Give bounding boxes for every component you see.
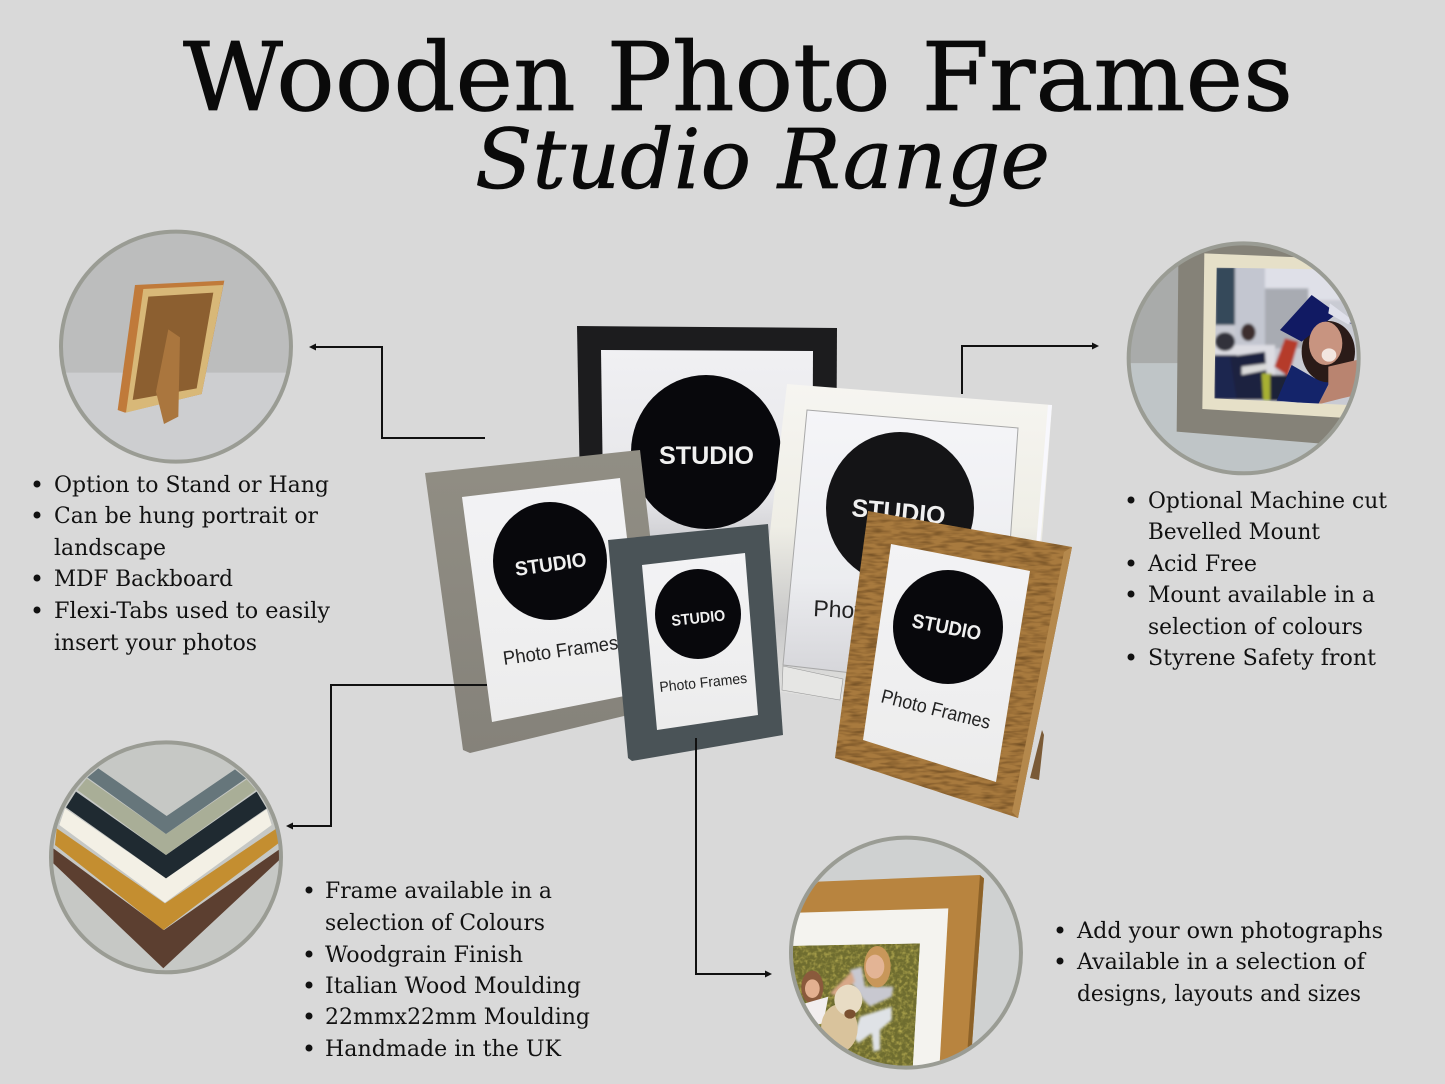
text block: mount features [1128, 489, 1387, 671]
text block: moulding features: Handmade in the UK [325, 1037, 562, 1062]
subtitle: Studio Range [475, 113, 1050, 208]
frame: black: STUDIO [659, 442, 754, 470]
photo circle: bevelled mount closeup [1125, 242, 1365, 477]
text block: moulding features: selection of Colours [325, 911, 545, 936]
frame: white: Photo Frames [813, 595, 958, 629]
frame: black [577, 326, 837, 560]
text block: moulding features: Frame available in a [325, 879, 552, 904]
text block: mount features: Bevelled Mount [1148, 520, 1320, 545]
frame: taupe: Photo Frames [502, 632, 620, 670]
frame: slate: Photo Frames [659, 671, 748, 696]
text block: mount features: Acid Free [1147, 552, 1257, 577]
text block: mount features: Styrene Safety front [1148, 646, 1376, 671]
title: Wooden Photo Frames [183, 23, 1293, 133]
product group: five frames [425, 326, 1072, 818]
text block: photographs and designs [1056, 919, 1383, 1007]
text block: stand and hang features: MDF Backboard [54, 567, 233, 592]
text block: stand and hang features: insert your photos [54, 631, 257, 656]
text block: stand and hang features [34, 473, 331, 656]
frame: taupe: STUDIO [514, 549, 588, 581]
photo circle: oak frame with family photograph [787, 833, 1027, 1073]
text block: mount features: Mount available in a [1148, 583, 1375, 608]
text block: stand and hang features: Can be hung portrait or [54, 504, 318, 529]
text block: moulding features: Woodgrain Finish [325, 943, 523, 968]
text block: photographs and designs: designs, layouts and sizes [1077, 982, 1361, 1007]
text block: mount features: selection of colours [1148, 615, 1363, 640]
frame: slate [608, 524, 783, 761]
arrow: frame to photographs photo [696, 738, 772, 978]
arrow: frame to mount photo [962, 342, 1099, 394]
frame: oak: Photo Frames [879, 686, 993, 734]
arrow: frame to stand photo [309, 344, 485, 438]
text block: moulding features: 22mmx22mm Moulding [325, 1005, 590, 1030]
frame: oak: STUDIO [910, 610, 983, 645]
frame: white [752, 384, 1052, 700]
arrow: frame to colours photo [286, 685, 487, 830]
text block: photographs and designs: Add your own photographs [1076, 919, 1383, 944]
text block: mount features: Optional Machine cut [1148, 489, 1387, 514]
text block: stand and hang features: Option to Stand or Hang [54, 473, 329, 498]
text block: moulding features [306, 879, 590, 1062]
photo circle: colour swatches of moulding [47, 737, 287, 980]
text block: moulding features: Italian Wood Moulding [325, 974, 581, 999]
photo circle: back of frame with stand [53, 227, 300, 469]
text block: photographs and designs: Available in a selection of [1076, 950, 1367, 975]
frame: white: STUDIO [850, 494, 947, 530]
text block: stand and hang features: Flexi-Tabs used to easily [54, 599, 331, 624]
text block: stand and hang features: landscape [54, 536, 166, 561]
frame: slate: STUDIO [671, 607, 726, 630]
frame: taupe [425, 450, 670, 753]
frame: oak [835, 511, 1072, 818]
